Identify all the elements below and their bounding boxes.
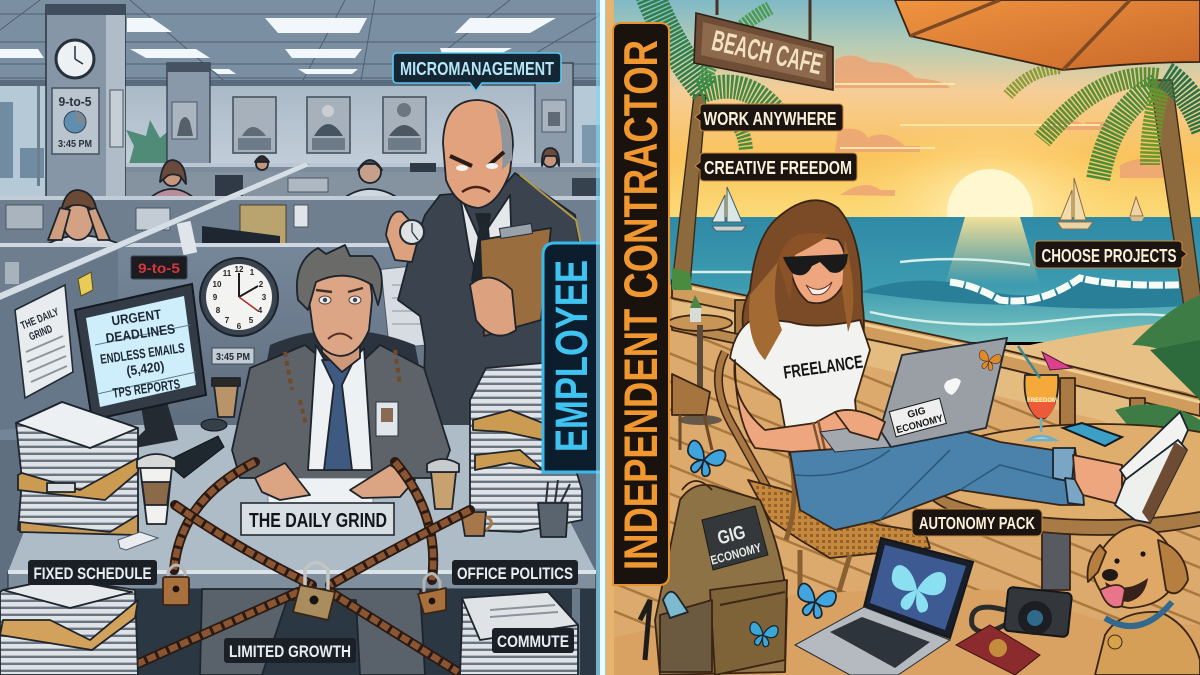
hands	[255, 463, 310, 500]
sun	[947, 169, 1033, 255]
glowing centre divider	[596, 0, 606, 675]
label: creative freedom	[695, 153, 857, 181]
monitor: ENDLESS EMAILS	[99, 340, 186, 367]
neck and head	[322, 325, 360, 372]
ceiling	[0, 0, 600, 86]
backpack: ECONOMY	[709, 541, 763, 568]
foreground laptop	[795, 538, 973, 675]
desk	[8, 425, 596, 589]
lapel grime	[285, 350, 400, 425]
sun reflection	[945, 217, 1040, 285]
cloud highlights	[835, 84, 1100, 148]
office clock: 8	[216, 306, 221, 315]
foreground wooden table	[604, 590, 1200, 675]
phone on table	[1063, 423, 1122, 446]
sticker gig economy: ECONOMY	[895, 413, 945, 436]
office clock: 6	[237, 322, 242, 331]
sticker gig economy: GIG	[906, 405, 927, 421]
hair front	[749, 262, 782, 360]
shirt	[308, 345, 372, 470]
sunglasses	[783, 254, 848, 275]
monitor: URGENT	[111, 307, 163, 328]
typing hand	[835, 410, 885, 440]
red 9-to-5 digital sign	[131, 256, 187, 279]
label: employee banner	[543, 243, 602, 472]
label: fixed schedule	[28, 560, 157, 585]
sky	[604, 0, 1200, 218]
smile	[806, 282, 832, 295]
t-shirt	[730, 318, 870, 455]
railing	[672, 280, 1200, 445]
middle cubicle partition	[0, 196, 600, 247]
glowing butterfly screen	[886, 564, 948, 616]
office clock: 5	[249, 316, 254, 325]
label: choose projects	[1035, 241, 1187, 268]
padlock right	[418, 573, 446, 614]
label: office politics	[452, 560, 578, 585]
label: fixed schedule: FIXED SCHEDULE	[34, 565, 152, 583]
monitor: TPS REPORTS	[112, 376, 181, 401]
stressed coworker holding head	[46, 190, 122, 245]
monitor: DEADLINES	[105, 321, 176, 346]
paper: the daily grind	[15, 285, 73, 398]
panel: employee office scene	[0, 0, 602, 675]
jeans cuffs	[1053, 448, 1084, 505]
id badge	[376, 402, 398, 436]
coffee mug	[461, 512, 492, 536]
coffee cup right	[427, 459, 459, 509]
butterfly on table	[793, 582, 837, 622]
sea	[604, 217, 1200, 342]
9-to-5 wall sign: 3:45 PM	[58, 138, 92, 150]
label: office politics: OFFICE POLITICS	[457, 565, 573, 583]
employee chair back	[267, 332, 419, 364]
wooden deck	[604, 285, 1200, 675]
face	[790, 238, 846, 303]
boss head	[443, 100, 513, 208]
column 1	[46, 5, 125, 197]
backpack: GIG	[715, 522, 748, 549]
monitor: (5,420)	[126, 358, 165, 379]
boss suit	[397, 172, 580, 425]
paper: the daily grind: GRIND	[28, 323, 54, 343]
freelance text: FREELANCE	[782, 352, 864, 383]
office clock: 2	[259, 280, 264, 289]
office clock: 4	[258, 306, 263, 315]
sailboats	[712, 178, 1144, 231]
sand	[860, 318, 1200, 430]
9-to-5 wall sign: 9-to-5	[58, 95, 92, 109]
office clock: 12	[235, 265, 244, 274]
wall clock	[56, 40, 94, 78]
tie	[322, 360, 354, 470]
the daily grind nameplate: THE DAILY GRIND	[249, 510, 387, 532]
backpack	[640, 481, 787, 675]
monitor	[75, 284, 206, 450]
label: micromanagement callout: MICROMANAGEMENT	[400, 58, 555, 79]
the daily grind nameplate	[241, 503, 394, 535]
boss micromanager	[385, 99, 582, 425]
cocktail: FREEDOM	[1027, 398, 1057, 404]
padlock left	[163, 565, 189, 605]
office clock: 9	[213, 293, 218, 302]
man's legs	[200, 589, 425, 675]
sun glow	[840, 115, 1140, 295]
back cubicle row	[124, 163, 600, 199]
parasol	[895, 0, 1200, 70]
left lower paper stack	[0, 578, 138, 675]
column 2	[167, 63, 210, 173]
butterfly sticker	[976, 350, 1002, 372]
paper: the daily grind: THE DAILY	[19, 306, 61, 332]
apple logo	[944, 378, 961, 395]
foreground left partition	[0, 162, 309, 440]
office clock: 11	[223, 269, 232, 278]
label: limited growth	[224, 638, 356, 663]
label: commute: COMMUTE	[497, 633, 569, 651]
sandy backdrop under railing	[672, 300, 1200, 470]
boss shirt and tie	[460, 194, 512, 266]
blue butterfly	[681, 439, 727, 481]
padlock centre	[293, 562, 335, 620]
chains	[135, 462, 470, 672]
hair back	[742, 200, 864, 370]
wall calendar	[380, 266, 424, 347]
clipboard	[480, 228, 551, 336]
plant	[126, 120, 166, 163]
label: creative freedom: CREATIVE FREEDOM	[704, 158, 852, 178]
wicker chair	[718, 352, 940, 595]
clouds	[835, 55, 1180, 196]
label: commute	[492, 628, 574, 653]
label: micromanagement callout	[393, 53, 561, 91]
beach plant	[1115, 295, 1200, 440]
sticker gig economy	[889, 398, 946, 437]
label: employee banner: EMPLOYEE	[546, 260, 597, 452]
9-to-5 wall sign	[52, 88, 99, 154]
cocktail	[1018, 346, 1072, 440]
silver laptop on lap	[820, 338, 1007, 452]
sticky note	[78, 272, 93, 296]
left strip of contractor panel	[604, 0, 614, 675]
office clock: 1	[250, 268, 255, 277]
arm	[734, 360, 880, 455]
left palm tree	[650, 0, 775, 285]
gig economy patch	[702, 506, 768, 570]
coffee cup left	[137, 454, 176, 524]
backpack butterfly	[747, 622, 779, 648]
background coworkers	[150, 148, 559, 198]
foreground cubicle wall	[0, 243, 424, 364]
round table	[920, 424, 1200, 590]
passport	[956, 625, 1040, 675]
beach cafe sign	[694, 0, 833, 90]
label: work anywhere	[695, 104, 843, 131]
3:45 pm tag	[212, 348, 254, 364]
beach cafe sign: BEACH CAFE	[709, 25, 825, 81]
under desk shadow	[136, 589, 596, 675]
right column	[535, 63, 573, 173]
exhausted employee	[232, 245, 450, 505]
right palm tree	[1008, 68, 1200, 320]
small background table and chair	[668, 268, 732, 450]
boss hand and stopwatch	[386, 211, 420, 262]
paper under hands	[268, 478, 373, 505]
label: work anywhere: WORK ANYWHERE	[704, 109, 836, 129]
back coffee cup	[212, 378, 240, 417]
contractor jeans	[790, 430, 1083, 530]
windows with city skyline	[0, 86, 602, 196]
contractor ankles	[1073, 455, 1122, 505]
office clock: 10	[213, 280, 222, 289]
red 9-to-5 digital sign: 9-to-5	[138, 260, 180, 276]
pen cup	[538, 480, 570, 537]
label: limited growth: LIMITED GROWTH	[229, 643, 351, 661]
left top paper stack	[16, 402, 138, 535]
right top paper stack	[470, 363, 582, 532]
label: autonomy pack	[912, 509, 1042, 536]
crumpled tissue	[118, 532, 158, 550]
suit	[232, 345, 450, 478]
waves	[680, 259, 1200, 324]
office clock: 7	[225, 316, 230, 325]
ceiling lights	[0, 18, 556, 74]
office clock	[200, 258, 278, 336]
office clock: 3	[262, 293, 267, 302]
camera	[972, 587, 1072, 637]
back wall	[126, 86, 534, 163]
label: autonomy pack: AUTONOMY PACK	[919, 513, 1035, 533]
3:45 pm tag: 3:45 PM	[216, 351, 250, 363]
independent contractor woman	[730, 200, 880, 455]
panel: independent contractor beach scene	[604, 0, 1200, 675]
keyboard and mouse	[165, 419, 227, 478]
sneakers	[1115, 412, 1188, 523]
right lower paper stack	[460, 592, 578, 675]
golden retriever	[1088, 525, 1200, 675]
wall posters	[233, 97, 426, 153]
